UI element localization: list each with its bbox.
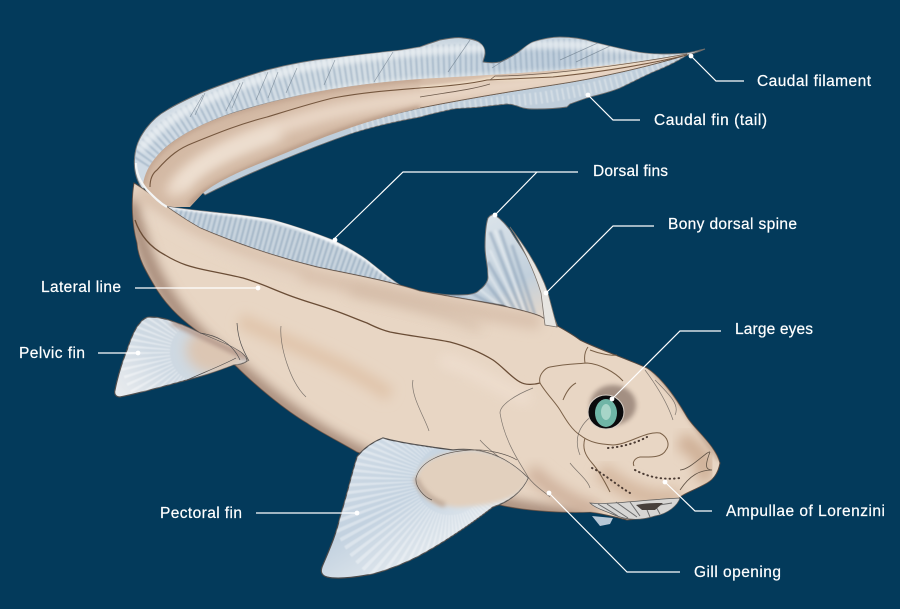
label: bony dorsal spine — [544, 216, 797, 295]
label: pelvic fin: Pelvic fin — [19, 345, 85, 362]
icon: large eye — [588, 395, 624, 429]
first dorsal fin — [420, 215, 558, 327]
label: caudal filament — [689, 54, 872, 90]
label: pectoral fin — [160, 505, 359, 522]
label: pectoral fin: Pectoral fin — [160, 505, 242, 522]
bony dorsal spine — [510, 227, 557, 327]
label: dorsal fins: Dorsal fins — [593, 163, 668, 180]
pelvic fin — [114, 316, 250, 398]
second dorsal fin — [167, 206, 401, 285]
label: lateral line: Lateral line — [41, 279, 121, 296]
label: lateral line — [41, 279, 260, 296]
tail body — [143, 54, 687, 207]
illustration: chimaera fish — [115, 37, 720, 578]
body shading — [132, 200, 590, 515]
upper caudal fin — [134, 37, 705, 190]
white fin edge at the bend — [136, 163, 167, 207]
lower caudal fin — [200, 55, 687, 195]
label: large eyes — [610, 321, 813, 401]
label: ampullae of Lorenzini: Ampullae of Lorenzini — [726, 503, 885, 520]
label: ampullae of Lorenzini — [663, 480, 885, 520]
ampullae of Lorenzini pores — [592, 437, 680, 493]
mouth and tooth plates — [590, 498, 680, 526]
label: gill opening — [547, 491, 781, 581]
tail lateral line — [150, 55, 687, 187]
body creases — [281, 326, 676, 497]
label: caudal filament: Caudal filament — [757, 73, 872, 90]
label: caudal fin — [586, 93, 767, 129]
label: pelvic fin — [19, 345, 140, 362]
label: gill opening: Gill opening — [694, 564, 781, 581]
label: caudal fin: Caudal fin (tail) — [654, 112, 767, 129]
front body — [132, 183, 720, 520]
eye socket shade — [590, 385, 636, 425]
label: dorsal fins — [333, 163, 668, 242]
pectoral fin — [320, 437, 529, 579]
label: large eyes: Large eyes — [735, 321, 813, 338]
lateral line — [135, 220, 540, 384]
label: bony dorsal spine: Bony dorsal spine — [668, 216, 797, 233]
head lateral lines — [540, 347, 668, 492]
